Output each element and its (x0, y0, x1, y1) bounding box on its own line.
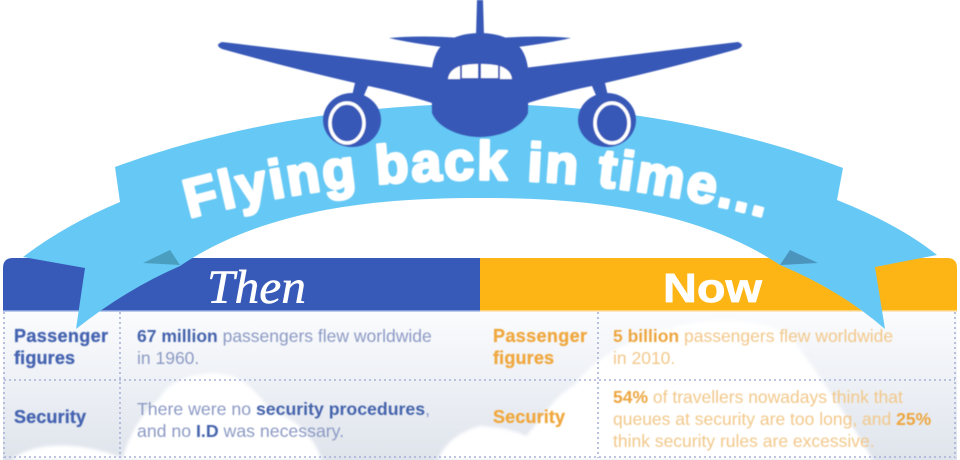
left engine (323, 93, 381, 147)
row labels: Now: Passenger (493, 326, 587, 346)
row labels: Now (493, 326, 587, 427)
text: Now security: 54% of travellers nowadays think that (613, 387, 903, 407)
text: Then passenger figures: in 1960. (137, 348, 199, 368)
left wing (218, 42, 440, 105)
icon: airplane (218, 0, 742, 147)
text: Then security: and no (137, 421, 196, 441)
heading: Then: Then (207, 261, 306, 314)
right engine (578, 93, 636, 147)
tailplane (389, 36, 571, 48)
text: Then passenger figures: 67 million passengers flew worldwide (137, 326, 432, 346)
heading: Now: Now (663, 265, 762, 311)
row labels: Then: figures (14, 348, 75, 368)
header: Then (3, 258, 480, 314)
text: Then security: There were no security procedures, (137, 399, 430, 419)
text: Now passenger figures: 5 billion passengers flew worldwide (613, 326, 893, 346)
ribbon fold left (143, 250, 180, 265)
fuselage (431, 33, 529, 137)
text: Now passenger figures: in 2010. (613, 348, 675, 368)
cockpit windows (448, 64, 512, 79)
row labels: Now: figures (493, 348, 554, 368)
text: Now security: 25% (896, 409, 932, 429)
ribbon fold right (780, 250, 818, 265)
right wing (520, 42, 742, 105)
panel: table background (3, 310, 957, 460)
text: Then security: I.D was necessary. (196, 421, 344, 441)
tail fin (476, 0, 484, 36)
text: Now security: think security rules are excessive. (613, 431, 875, 451)
comparison table (3, 258, 957, 460)
ribbon banner (23, 104, 937, 329)
header: Now (480, 258, 957, 311)
clouds (12, 321, 873, 460)
title: Flying back in time... (181, 138, 765, 220)
text: Now security: queues at security are too long, and (613, 409, 896, 429)
row labels: Then: Security (14, 407, 86, 427)
row labels: Then: Passenger (14, 326, 108, 346)
row labels: Then (14, 326, 108, 427)
row labels: Now: Security (493, 407, 565, 427)
